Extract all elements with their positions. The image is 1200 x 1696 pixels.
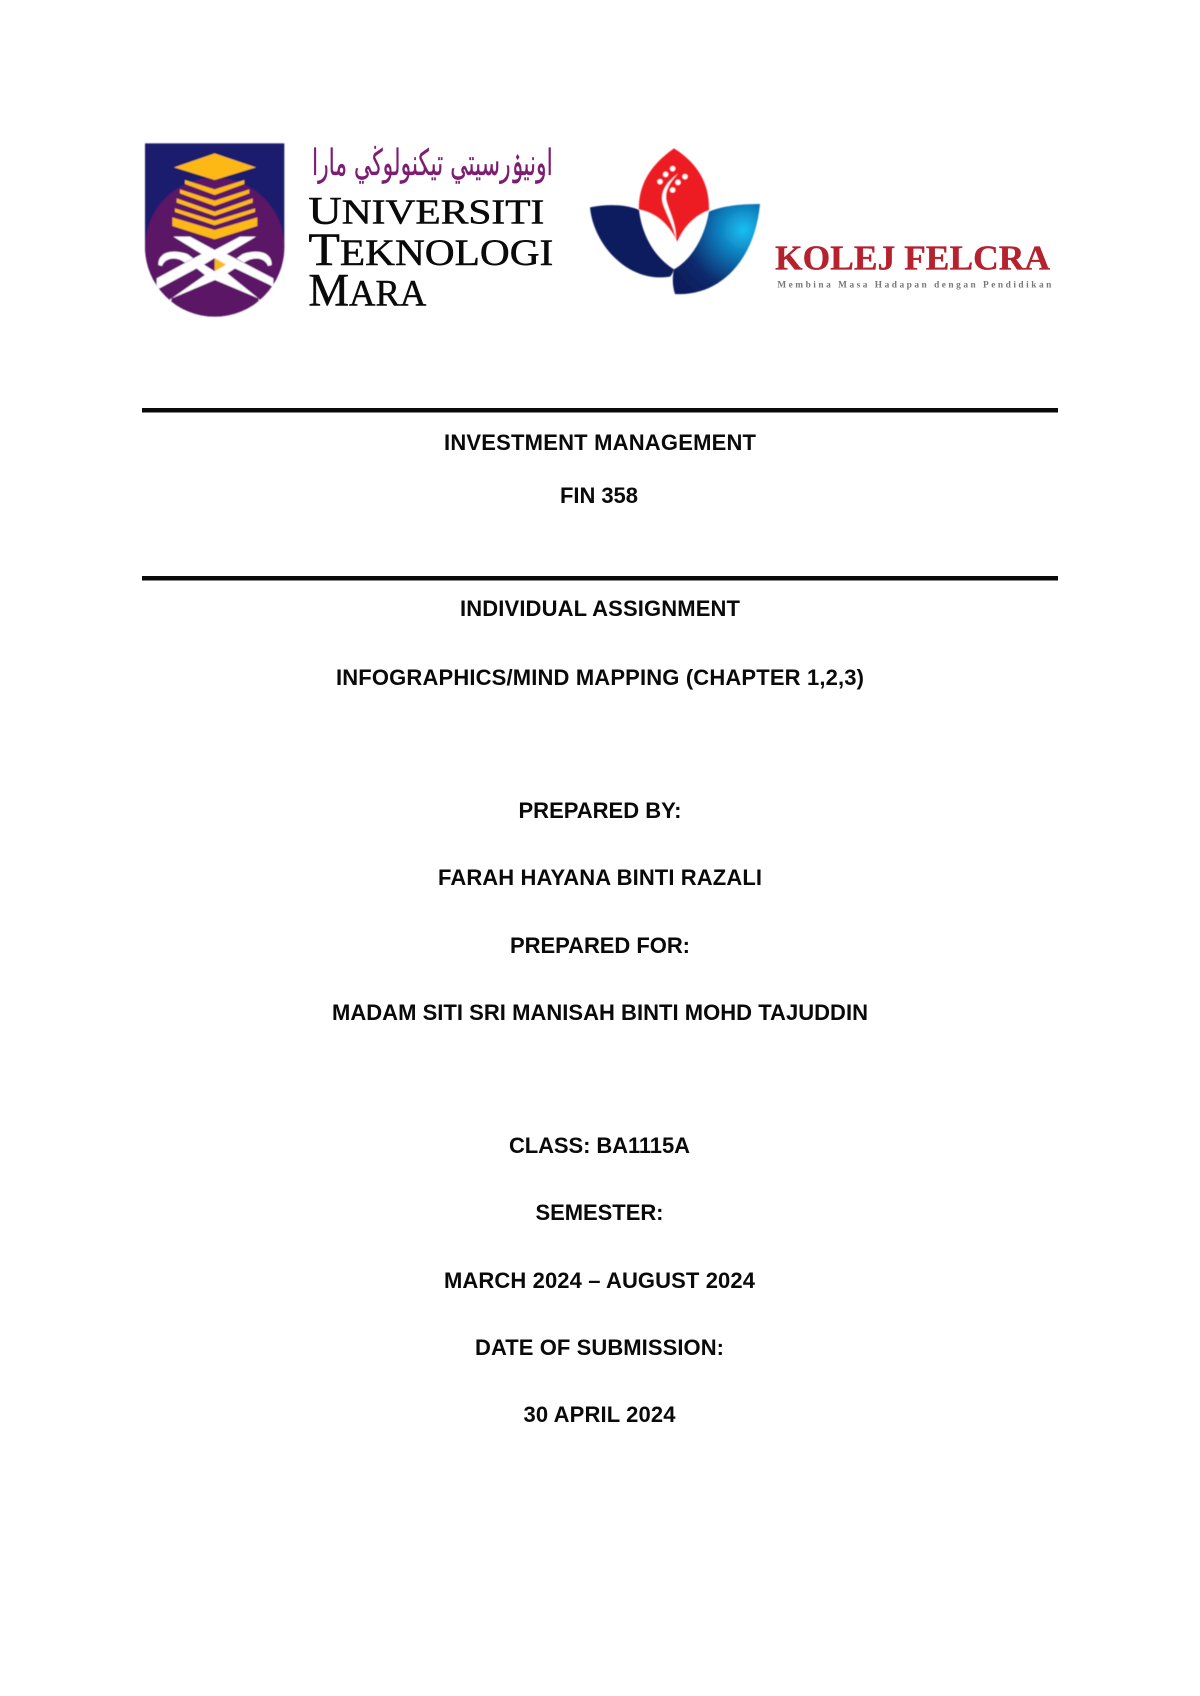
text: submission label: DATE OF SUBMISSION: [475, 1335, 724, 1360]
text: UNIVERSITI: UNIVERSITI [308, 190, 544, 232]
text: KOLEJ FELCRA: KOLEJ FELCRA [775, 239, 1050, 277]
text: prepared by label: PREPARED BY: [518, 798, 682, 823]
heading: course code: FIN 358 [560, 483, 638, 508]
text: MARA: MARA [308, 265, 426, 317]
heading: course title: INVESTMENT MANAGEMENT [444, 430, 757, 455]
icon: Kolej Felcra lotus [590, 148, 760, 294]
text: UiTM Jawi name: اونيۏرسيتي تيكنولوڬي مارا [312, 143, 553, 184]
logo: Kolej Felcra [590, 148, 1052, 294]
text: student name: FARAH HAYANA BINTI RAZALI [438, 865, 762, 890]
text: TEKNOLOGI: TEKNOLOGI [308, 224, 553, 276]
icon: UiTM shield crest [145, 143, 284, 323]
logo: Universiti Teknologi MARA [145, 143, 553, 323]
text: semester label: SEMESTER: [536, 1200, 664, 1225]
text: submission date: 30 APRIL 2024 [524, 1402, 676, 1427]
text: prepared for label: PREPARED FOR: [510, 933, 690, 958]
text: class: CLASS: BA1115A [509, 1133, 690, 1158]
heading: assignment type: INDIVIDUAL ASSIGNMENT [460, 596, 741, 621]
text: semester dates: MARCH 2024 – AUGUST 2024 [444, 1268, 756, 1293]
text: tagline: Membina Masa Hadapan dengan Pendidikan [777, 280, 1052, 290]
heading: assignment topic: INFOGRAPHICS/MIND MAPPING (CHAPTER 1,2,3) [336, 665, 864, 690]
text: lecturer name: MADAM SITI SRI MANISAH BINTI MOHD TAJUDDIN [332, 1000, 868, 1025]
